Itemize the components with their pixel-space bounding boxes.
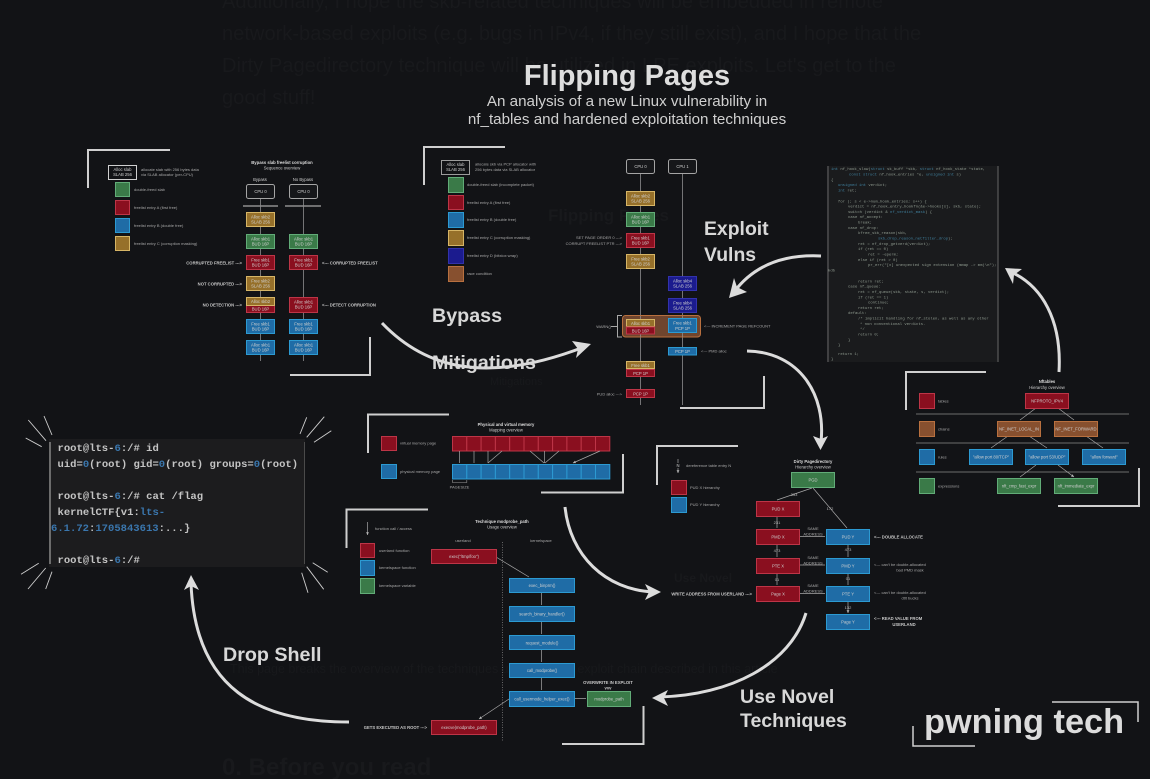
panel: root terminal: root@lts-6:/# <box>58 555 140 567</box>
legend: bypass: Alloc slab <box>114 167 132 172</box>
panel: dirty pagedirectory hierarchy: 231 <box>774 520 781 525</box>
panel: dirty pagedirectory hierarchy: 01 <box>775 577 780 582</box>
panel: root terminal: kernelCTF{v1:lts- <box>58 507 165 519</box>
panel: root terminal: 6.1.72:1705843613:...} <box>51 523 190 535</box>
sequence diagram: bypass: BUD 16P <box>295 262 312 268</box>
legend: dirty pagedirectory: PUD Y hierarchy <box>690 502 720 507</box>
sequence diagram: exploit: PCP 1P <box>675 326 690 331</box>
legend: dirty pagedirectory <box>672 459 731 512</box>
sequence diagram: exploit: CORRUPT FREELIST PTR ---> <box>566 241 623 246</box>
panel: modprobe_path technique: exec("/tmp/foo") <box>449 554 479 559</box>
panel: modprobe_path technique: userland <box>455 538 471 543</box>
panel: bypass slab freelist corruption <box>88 150 378 375</box>
panel: dirty pagedirectory hierarchy: WRITE ADDRESS FROM USERLAND ---> <box>671 592 753 596</box>
sequence diagram: bypass: Free skb1 <box>251 322 270 326</box>
panel: dirty pagedirectory hierarchy: SAME <box>807 555 819 560</box>
faint background article text <box>222 0 921 779</box>
legend: exploit: freelist entry B (double free) <box>467 217 517 222</box>
panel: dirty pagedirectory hierarchy: dtlt bucks <box>902 596 918 600</box>
panel: exploit vulnerabilities sequence <box>424 147 771 408</box>
panel: physical and virtual memory: Mapping overview <box>489 428 524 432</box>
sequence diagram: exploit: SLAB 256 <box>631 198 651 204</box>
subtitle: An analysis of a new Linux vulnerability in <box>487 93 767 110</box>
legend: memory: virtual memory page <box>400 440 437 446</box>
legend: bypass: SLAB 256 <box>113 172 133 177</box>
panel: code snippet nf_hook_slow <box>827 166 998 362</box>
legend: bypass: freelist entry B (double free) <box>134 223 184 228</box>
legend: exploit: double-freed slab (incomplete packet) <box>467 182 535 187</box>
panel: physical and virtual memory: PAGESIZE <box>450 484 470 490</box>
sequence diagram: bypass: Sequence overview <box>264 166 301 170</box>
panel: code snippet nf_hook_slow: continue; <box>868 300 889 306</box>
legend: modprobe <box>360 522 416 594</box>
sequence diagram: bypass: BUD 16P <box>295 326 312 332</box>
panel: code snippet nf_hook_slow: pr_err("[x] unexpected sign extension (mmap -> mm)\n"); <box>868 263 996 268</box>
legend: exploit: Alloc slab <box>447 162 465 167</box>
panel: code snippet nf_hook_slow: verdict = nf_hook_entry_hookfn(&e->hooks[s], skb, state); <box>848 204 981 210</box>
panel: dirty pagedirectory hierarchy: ADDRESS <box>803 532 823 536</box>
panel: dirty pagedirectory hierarchy: <--- can't be double-allocated <box>874 590 926 595</box>
panel: modprobe_path technique: search_binary_handler() <box>519 612 565 616</box>
panel: modprobe_path technique <box>346 510 644 744</box>
legend: exploit <box>442 160 536 282</box>
heading: exploit vulns: Vulns <box>704 244 756 266</box>
sequence diagram: exploit: Free skb1 <box>673 320 692 326</box>
panel: dirty pagedirectory hierarchy: PUD Y <box>842 534 855 540</box>
virtual pages row <box>452 436 610 451</box>
legend: bypass: double-freed slab <box>134 187 166 192</box>
sequence diagram: exploit: Alloc skb1 <box>631 321 651 326</box>
panel: root terminal: root@lts-6:/# cat /flag <box>58 491 203 503</box>
sequence diagram: bypass: CPU 0 <box>254 189 267 194</box>
arrow: to modprobe <box>652 613 806 706</box>
sequence diagram: exploit: Alloc skb2 <box>631 194 651 198</box>
sequence diagram: bypass: BUD 16P <box>252 326 269 332</box>
sequence diagram: bypass: Free skb2 <box>251 278 270 284</box>
panel: physical and virtual memory <box>368 414 623 492</box>
panel: code snippet nf_hook_slow: } <box>838 343 840 348</box>
panel: nftables hierarchy: nft_immediate_expr <box>1058 484 1095 488</box>
panel: nftables hierarchy: NF_INET_FORWARD <box>1055 426 1097 432</box>
legend: exploit: freelist entry A (first free) <box>467 200 511 205</box>
sequence diagram: bypass: NO DETECTION ---> <box>203 302 243 308</box>
arrow: exploit to code <box>729 256 821 298</box>
sequence diagram: bypass: Free skb1 <box>294 258 313 262</box>
panel: dirty pagedirectory hierarchy: ADDRESS <box>803 560 823 566</box>
panel: modprobe_path technique: request_module() <box>526 640 559 646</box>
sequence diagram: exploit: PCP 1P <box>633 371 648 376</box>
panel: dirty pagedirectory hierarchy: Page Y <box>841 620 855 624</box>
sequence diagram: bypass: BUD 16P <box>252 348 269 352</box>
sequence diagram: bypass: BUD 16P <box>295 304 312 310</box>
sequence diagram: bypass: Free skb1 <box>294 322 313 326</box>
panel: code snippet nf_hook_slow: case nf_accept: <box>848 215 883 220</box>
heading: use novel techniques: Use Novel <box>740 686 834 708</box>
panel: code snippet nf_hook_slow: return 1; <box>838 353 859 357</box>
panel: code snippet nf_hook_slow: } <box>848 338 850 343</box>
faint background article text: This page breaks the overview of the techniques used and the exploit chain described in this article <box>230 662 778 676</box>
panel: code snippet nf_hook_slow: int ret; <box>838 188 857 194</box>
panel: dirty pagedirectory hierarchy: PTE Y <box>842 592 854 596</box>
sequence diagram: bypass: <--- DETECT CORRUPTION <box>322 302 376 308</box>
panel: code snippet nf_hook_slow: case nf_queue: <box>848 284 881 290</box>
panel: dirty pagedirectory hierarchy: PMD X <box>771 534 785 540</box>
sequence diagram: exploit: CPU 1 <box>676 164 689 169</box>
legend: bypass: allocate slab with 256 bytes data <box>141 167 200 172</box>
sequence diagram: exploit: WARN() <box>596 324 612 329</box>
sequence diagram: bypass: CORRUPTED FREELIST ---> <box>186 260 243 266</box>
panel: root terminal: uid=0(root) gid=0(root) groups=0(root) <box>58 459 298 471</box>
legend: nftables: chains <box>938 426 950 432</box>
panel: code snippet nf_hook_slow: unsigned int verdict; <box>838 183 887 188</box>
sequence diagram: bypass: CPU 0 <box>297 189 310 194</box>
legend: memory: physical memory page <box>400 469 441 474</box>
sequence diagram: bypass: Alloc skb1 <box>294 300 314 304</box>
panel: code snippet nf_hook_slow: break; <box>858 220 872 226</box>
panel: modprobe_path technique: call_usermode_helper_exec() <box>514 696 570 702</box>
legend: bypass: freelist entry C (corruption masking) <box>134 241 198 246</box>
panel: dirty pagedirectory hierarchy: USERLAND <box>892 622 916 627</box>
legend: exploit: SLAB 256 <box>446 167 466 172</box>
panel: dirty pagedirectory hierarchy: PMD Y <box>841 564 855 568</box>
legend: nftables: expressions <box>938 484 959 488</box>
legend: bypass: freelist entry A (first free) <box>134 205 178 210</box>
sequence diagram: bypass: BUD 16P <box>252 242 269 246</box>
panel: dirty pagedirectory hierarchy: <--- DOUBLE ALLOCATE <box>874 534 923 540</box>
panel: dirty pagedirectory hierarchy: 473 <box>774 548 781 553</box>
sequence diagram: exploit: Free skb2 <box>631 256 650 262</box>
panel: dirty pagedirectory hierarchy: 132 <box>845 605 852 610</box>
panel: code snippet nf_hook_slow: case nf_drop: <box>848 226 878 231</box>
sequence diagram: bypass: SLAB 256 <box>251 220 271 224</box>
panel: code snippet nf_hook_slow: * non conventional verdicts. <box>860 322 925 327</box>
panel: root terminal <box>21 416 331 593</box>
sequence diagram: bypass: Free skb1 <box>251 258 270 262</box>
panel: code snippet nf_hook_slow: const struct nf_hook_entries *e, unsigned int s) <box>849 172 961 178</box>
panel: dirty pagedirectory hierarchy: Page X <box>771 592 785 596</box>
sequence diagram: exploit: Free skb1 <box>631 236 650 240</box>
panel: code snippet nf_hook_slow: skb_drop_reason_netfilter_drop); <box>878 236 953 242</box>
heading: bypass: Bypass <box>432 305 502 327</box>
legend: dirty pagedirectory: PUD X hierarchy <box>690 485 720 490</box>
panel: code snippet nf_hook_slow: for (; s < e->num_hook_entries; s++) { <box>838 200 927 204</box>
sequence diagram: exploit: SLAB 256 <box>673 284 693 288</box>
panel: code snippet nf_hook_slow: kfree_skb_reason(skb, <box>858 231 907 236</box>
sequence diagram: bypass: Bypass <box>253 177 267 182</box>
sequence diagram: bypass <box>186 160 378 361</box>
sequence diagram: bypass: NOT CORRUPTED ---> <box>198 282 243 286</box>
sequence diagram: bypass: Alloc skb2 <box>251 299 271 304</box>
panel: code snippet nf_hook_slow: return ret; <box>858 280 884 284</box>
heading: use novel techniques: Techniques <box>740 710 847 732</box>
faint background article text: Mitigations <box>490 376 543 388</box>
panel: modprobe_path technique: vvv <box>604 686 612 690</box>
legend: memory <box>382 436 441 478</box>
panel: code snippet nf_hook_slow: kdb <box>828 268 836 274</box>
legend: nftables: rules <box>938 454 947 460</box>
sequence diagram: exploit: SET PAGE ORDER 0 ---> <box>576 235 623 240</box>
heading: mitigations: Mitigations <box>432 352 536 374</box>
legend: exploit: 256 bytes data via SLAB allocator <box>475 167 536 172</box>
panel: dirty pagedirectory hierarchy: Dirty Pagedirectory <box>794 459 833 464</box>
sequence diagram: bypass: <--- CORRUPTED FREELIST <box>322 260 378 266</box>
panel: modprobe_path technique: Usage overview <box>487 524 518 530</box>
panel: dirty pagedirectory hierarchy: PGD <box>808 478 818 482</box>
panel: code snippet nf_hook_slow: ret = nf_queue(skb, state, s, verdict); <box>858 290 949 295</box>
panel: dirty pagedirectory hierarchy: 172 <box>827 506 834 511</box>
sequence diagram: bypass: BUD 16P <box>252 262 269 268</box>
sequence diagram: exploit: BUD 16P <box>632 328 649 333</box>
panel: code snippet nf_hook_slow: /* implicit handling for nf_stolen, as well as any other <box>858 316 989 322</box>
panel: nftables hierarchy: "allow port 80/TCP" <box>973 454 1010 460</box>
panel: code snippet nf_hook_slow: if (ret == 1) <box>858 296 888 300</box>
sequence diagram: bypass: Alloc skb2 <box>251 214 271 220</box>
panel: nftables hierarchy <box>906 372 1139 506</box>
panel: nftables hierarchy: nft_cmp_fast_expr <box>1002 484 1037 488</box>
arrow: to dirty pagedirectory <box>747 351 828 450</box>
panel: nftables hierarchy: Nftables <box>1039 379 1056 384</box>
physical pages row <box>452 464 610 479</box>
panel: dirty pagedirectory hierarchy: 01 <box>846 576 851 581</box>
sequence diagram: bypass: No Bypass <box>293 177 313 182</box>
panel: modprobe_path technique: call_modprobe() <box>527 668 558 673</box>
panel: dirty pagedirectory hierarchy <box>657 446 926 630</box>
panel: code snippet nf_hook_slow: int nf_hook_slow(struct sk_buff *skb, struct nf_hook_state *state, <box>831 167 985 172</box>
subtitle <box>468 93 787 128</box>
legend: exploit: freelist entry D (bitxiox wrap) <box>467 253 518 258</box>
sequence diagram: exploit: SLAB 256 <box>631 262 651 266</box>
panel: code snippet nf_hook_slow: return 0; <box>858 334 879 338</box>
sequence diagram: bypass: Alloc skb1 <box>251 342 271 348</box>
legend: dirty pagedirectory: N <box>676 463 680 468</box>
panel: root terminal: root@lts-6:/# id <box>58 443 159 455</box>
heading: use novel techniques <box>740 686 847 732</box>
panel: code snippet nf_hook_slow: ret = -eperm; <box>868 254 898 258</box>
panel: code snippet nf_hook_slow: else if (ret > 0) <box>858 258 898 263</box>
panel: nftables hierarchy: "allow port 53/UDP" <box>1029 454 1066 460</box>
faint background article text: network-based exploits (e.g. bugs in IPv4, if they still exist), and I hope that the <box>222 23 921 45</box>
legend: modprobe: kernelspace function <box>379 565 416 570</box>
sequence diagram: exploit: CPU 0 <box>634 164 647 169</box>
panel: dirty pagedirectory hierarchy: bad PMD mask <box>896 568 924 572</box>
arrow: memory to page walk <box>565 507 661 600</box>
panel: dirty pagedirectory hierarchy: 333 <box>791 492 798 497</box>
sequence diagram: bypass: Alloc skb1 <box>251 236 271 242</box>
faint background article text: good stuff! <box>222 87 315 109</box>
panel: code snippet nf_hook_slow: ret = nf_drop_getverd(verdict); <box>858 242 930 247</box>
sequence diagram: exploit: PCP 1P <box>675 349 690 354</box>
legend: exploit: allocate skb via PCP allocator with <box>475 162 536 166</box>
heading: exploit vulns <box>704 218 769 266</box>
sequence diagram: bypass: Alloc skb1 <box>294 236 314 242</box>
panel: modprobe_path technique: Technique modprobe_path <box>475 519 529 524</box>
panel: dirty pagedirectory hierarchy: PTE X <box>772 564 784 568</box>
panel: dirty pagedirectory hierarchy: <--- READ VALUE FROM <box>874 616 923 621</box>
panel: modprobe_path technique: exec_binprm() <box>529 583 556 588</box>
panel: nftables hierarchy: Hierarchy overview <box>1029 385 1066 390</box>
panel: dirty pagedirectory hierarchy: SAME <box>807 583 819 588</box>
arrow: code to nftables <box>1005 268 1059 372</box>
sequence diagram: bypass: Bypass slab freelist corruption <box>251 160 313 165</box>
sequence diagram: bypass: Alloc skb1 <box>294 342 314 348</box>
legend: exploit: freelist entry C (corruption masking) <box>467 235 531 240</box>
sequence diagram: exploit: Alloc skb1 <box>631 214 651 220</box>
faint background article text: Dirty Pagedirectory technique will be utilized in LPE exploits. Let's get to the <box>222 55 896 77</box>
legend: modprobe: function call / access <box>375 526 412 531</box>
sequence diagram: exploit <box>566 160 771 405</box>
sequence diagram: exploit: BUD 16P <box>632 220 649 224</box>
arrow: mitigations to exploit <box>382 323 591 368</box>
panel: code snippet nf_hook_slow: { <box>831 178 834 183</box>
sequence diagram: exploit: <--- PMD alloc <box>701 348 727 354</box>
panel: modprobe_path technique: execve(modprobe_path) <box>441 725 487 730</box>
title: Flipping Pages <box>524 60 730 92</box>
faint background article text: Flipping Pages <box>548 206 669 225</box>
sequence diagram: bypass: SLAB 256 <box>251 284 271 288</box>
faint background article text: Use Novel <box>674 571 732 585</box>
panel: dirty pagedirectory hierarchy: PUD X <box>772 506 785 512</box>
legend: nftables <box>920 394 959 494</box>
subtitle: nf_tables and hardened exploitation techniques <box>468 111 787 128</box>
panel: nftables hierarchy: "allow forward" <box>1090 454 1118 460</box>
sequence diagram: exploit: Alloc skb4 <box>673 278 693 284</box>
sequence diagram: bypass: BUD 16P <box>295 348 312 352</box>
legend: modprobe: kernelspace variable <box>379 583 416 588</box>
arrow: to shell <box>184 575 349 722</box>
legend: modprobe: userland function <box>379 548 409 553</box>
panel: nftables hierarchy: NFPROTO_IPV4 <box>1031 398 1064 404</box>
sequence diagram: exploit: <--- INCREMENT PAGE REFCOUNT <box>704 324 771 328</box>
panel: code snippet nf_hook_slow: return ret; <box>858 307 884 311</box>
heading: exploit vulns: Exploit <box>704 218 769 240</box>
legend: bypass <box>108 166 200 250</box>
legend: dirty pagedirectory: dereference table entry N <box>686 463 731 468</box>
heading: drop shell: Drop Shell <box>223 644 321 666</box>
legend: exploit: race condition <box>467 271 492 276</box>
panel: dirty pagedirectory hierarchy: 473 <box>845 547 852 552</box>
panel: dirty pagedirectory hierarchy: Hierarchy overview <box>795 464 832 470</box>
panel: modprobe_path technique: kernelspace <box>530 538 553 543</box>
panel: dirty pagedirectory hierarchy: SAME <box>807 526 819 531</box>
panel: physical and virtual memory: Physical and virtual memory <box>478 422 535 427</box>
panel: code snippet nf_hook_slow: default: <box>848 311 867 316</box>
panel: code snippet nf_hook_slow: if (ret == 0) <box>858 247 888 252</box>
panel: dirty pagedirectory hierarchy: <--- can't be double-allocated <box>874 562 926 567</box>
sequence diagram: exploit: SLAB 256 <box>673 306 693 310</box>
sequence diagram: exploit: Free skb4 <box>673 300 692 306</box>
sequence diagram: bypass: BUD 16P <box>295 242 312 246</box>
panel: modprobe_path technique: GETS EXECUTED AS ROOT ---> <box>364 725 428 730</box>
panel: modprobe_path technique: modprobe_path <box>594 696 624 702</box>
legend: bypass: via SLAB allocator (per-CPU) <box>141 172 194 177</box>
panel: code snippet nf_hook_slow: */ <box>860 327 865 332</box>
legend: nftables: tables <box>938 398 949 404</box>
sequence diagram: exploit: PCP 1P <box>633 392 648 396</box>
sequence diagram: exploit: Free skb1 <box>631 363 650 368</box>
rays around terminal <box>21 416 331 593</box>
panel: modprobe_path technique: OVERWRITE IN EXPLOIT <box>583 680 633 685</box>
brand: pwning tech: pwning tech <box>924 703 1124 741</box>
sequence diagram: exploit: PUD alloc ---> <box>597 392 623 396</box>
panel: nftables hierarchy: NF_INET_LOCAL_IN <box>999 426 1039 432</box>
sequence diagram: exploit: BUD 16P <box>632 240 649 246</box>
panel: dirty pagedirectory hierarchy: ADDRESS <box>803 588 823 594</box>
sequence diagram: bypass: BUD 16P <box>252 306 269 312</box>
panel: code snippet nf_hook_slow: } <box>831 357 833 362</box>
panel: code snippet nf_hook_slow: switch (verdict & nf_verdict_mask) { <box>848 210 933 215</box>
